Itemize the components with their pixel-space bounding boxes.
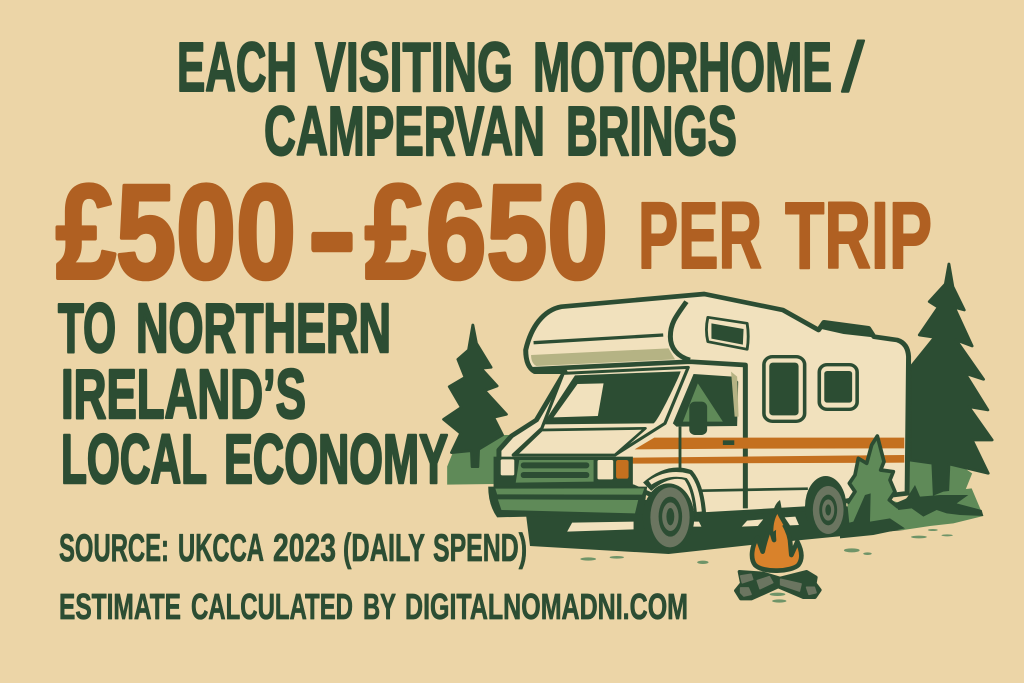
bumper [488, 487, 647, 517]
logs [736, 572, 820, 599]
door window and mirror [673, 372, 739, 435]
headline amount: £500–£650 per trip: PER [638, 183, 762, 289]
left tree with hill [444, 325, 510, 485]
shrub and grass [840, 436, 983, 538]
heading: each visiting motorhome / campervan brings: / [842, 28, 865, 106]
heading: each visiting motorhome / campervan brings [177, 28, 865, 170]
hood [516, 428, 645, 455]
headline amount: £500–£650 per trip: – [311, 158, 353, 307]
overcab shade [531, 348, 675, 366]
overcab details [534, 335, 663, 343]
source note: UKCCA [178, 527, 264, 570]
headline amount: £500–£650 per trip [56, 158, 932, 307]
flame [752, 513, 801, 571]
ground shadow [525, 500, 904, 554]
van body [499, 294, 909, 515]
text block: to Northern Ireland's local economy: NORTHERN [136, 289, 391, 367]
windshield [513, 367, 688, 455]
estimate credit: DIGITALNOMADNI.COM [405, 586, 688, 627]
headline amount: £500–£650 per trip: TRIP [785, 183, 932, 289]
text block: to Northern Ireland's local economy [58, 289, 448, 498]
heading: each visiting motorhome / campervan brings: VISITING [315, 28, 513, 106]
illustration: campervan scene [444, 264, 992, 603]
orange stripes [631, 438, 904, 464]
text block: to Northern Ireland's local economy: LOCAL [61, 420, 207, 498]
heading: each visiting motorhome / campervan brings: BRINGS [566, 92, 737, 170]
text block: to Northern Ireland's local economy: ECONOMY [224, 420, 448, 498]
headline amount: £500–£650 per trip: £500 [56, 158, 296, 307]
estimate credit: BY [363, 586, 396, 627]
rear wheel [805, 476, 846, 537]
front wheel [643, 483, 694, 551]
estimate credit [59, 586, 688, 627]
estimate credit: CALCULATED [191, 586, 353, 627]
right tree [910, 264, 992, 503]
source note: SPEND) [433, 527, 527, 570]
ground specks [580, 529, 953, 603]
underbody cutouts [567, 517, 799, 532]
text block: to Northern Ireland's local economy: IRELAND’S [61, 355, 306, 433]
heading: each visiting motorhome / campervan brings: CAMPERVAN [264, 92, 545, 170]
source note: (DAILY [343, 527, 425, 570]
front wheel arch [647, 473, 700, 513]
roof vent [819, 321, 874, 337]
icon: campfire [736, 500, 820, 599]
heading: each visiting motorhome / campervan brings: EACH [177, 28, 297, 106]
headline amount: £500–£650 per trip: £650 [365, 158, 608, 307]
windows [706, 317, 857, 421]
source note: 2023 [273, 527, 336, 570]
text block: to Northern Ireland's local economy: TO [58, 289, 116, 367]
grille and lights [494, 457, 633, 488]
source note: SOURCE: [59, 527, 169, 570]
lower body line [680, 427, 808, 491]
heading: each visiting motorhome / campervan brings: MOTORHOME [533, 28, 832, 106]
estimate credit: ESTIMATE [59, 586, 181, 627]
source note [59, 527, 527, 570]
